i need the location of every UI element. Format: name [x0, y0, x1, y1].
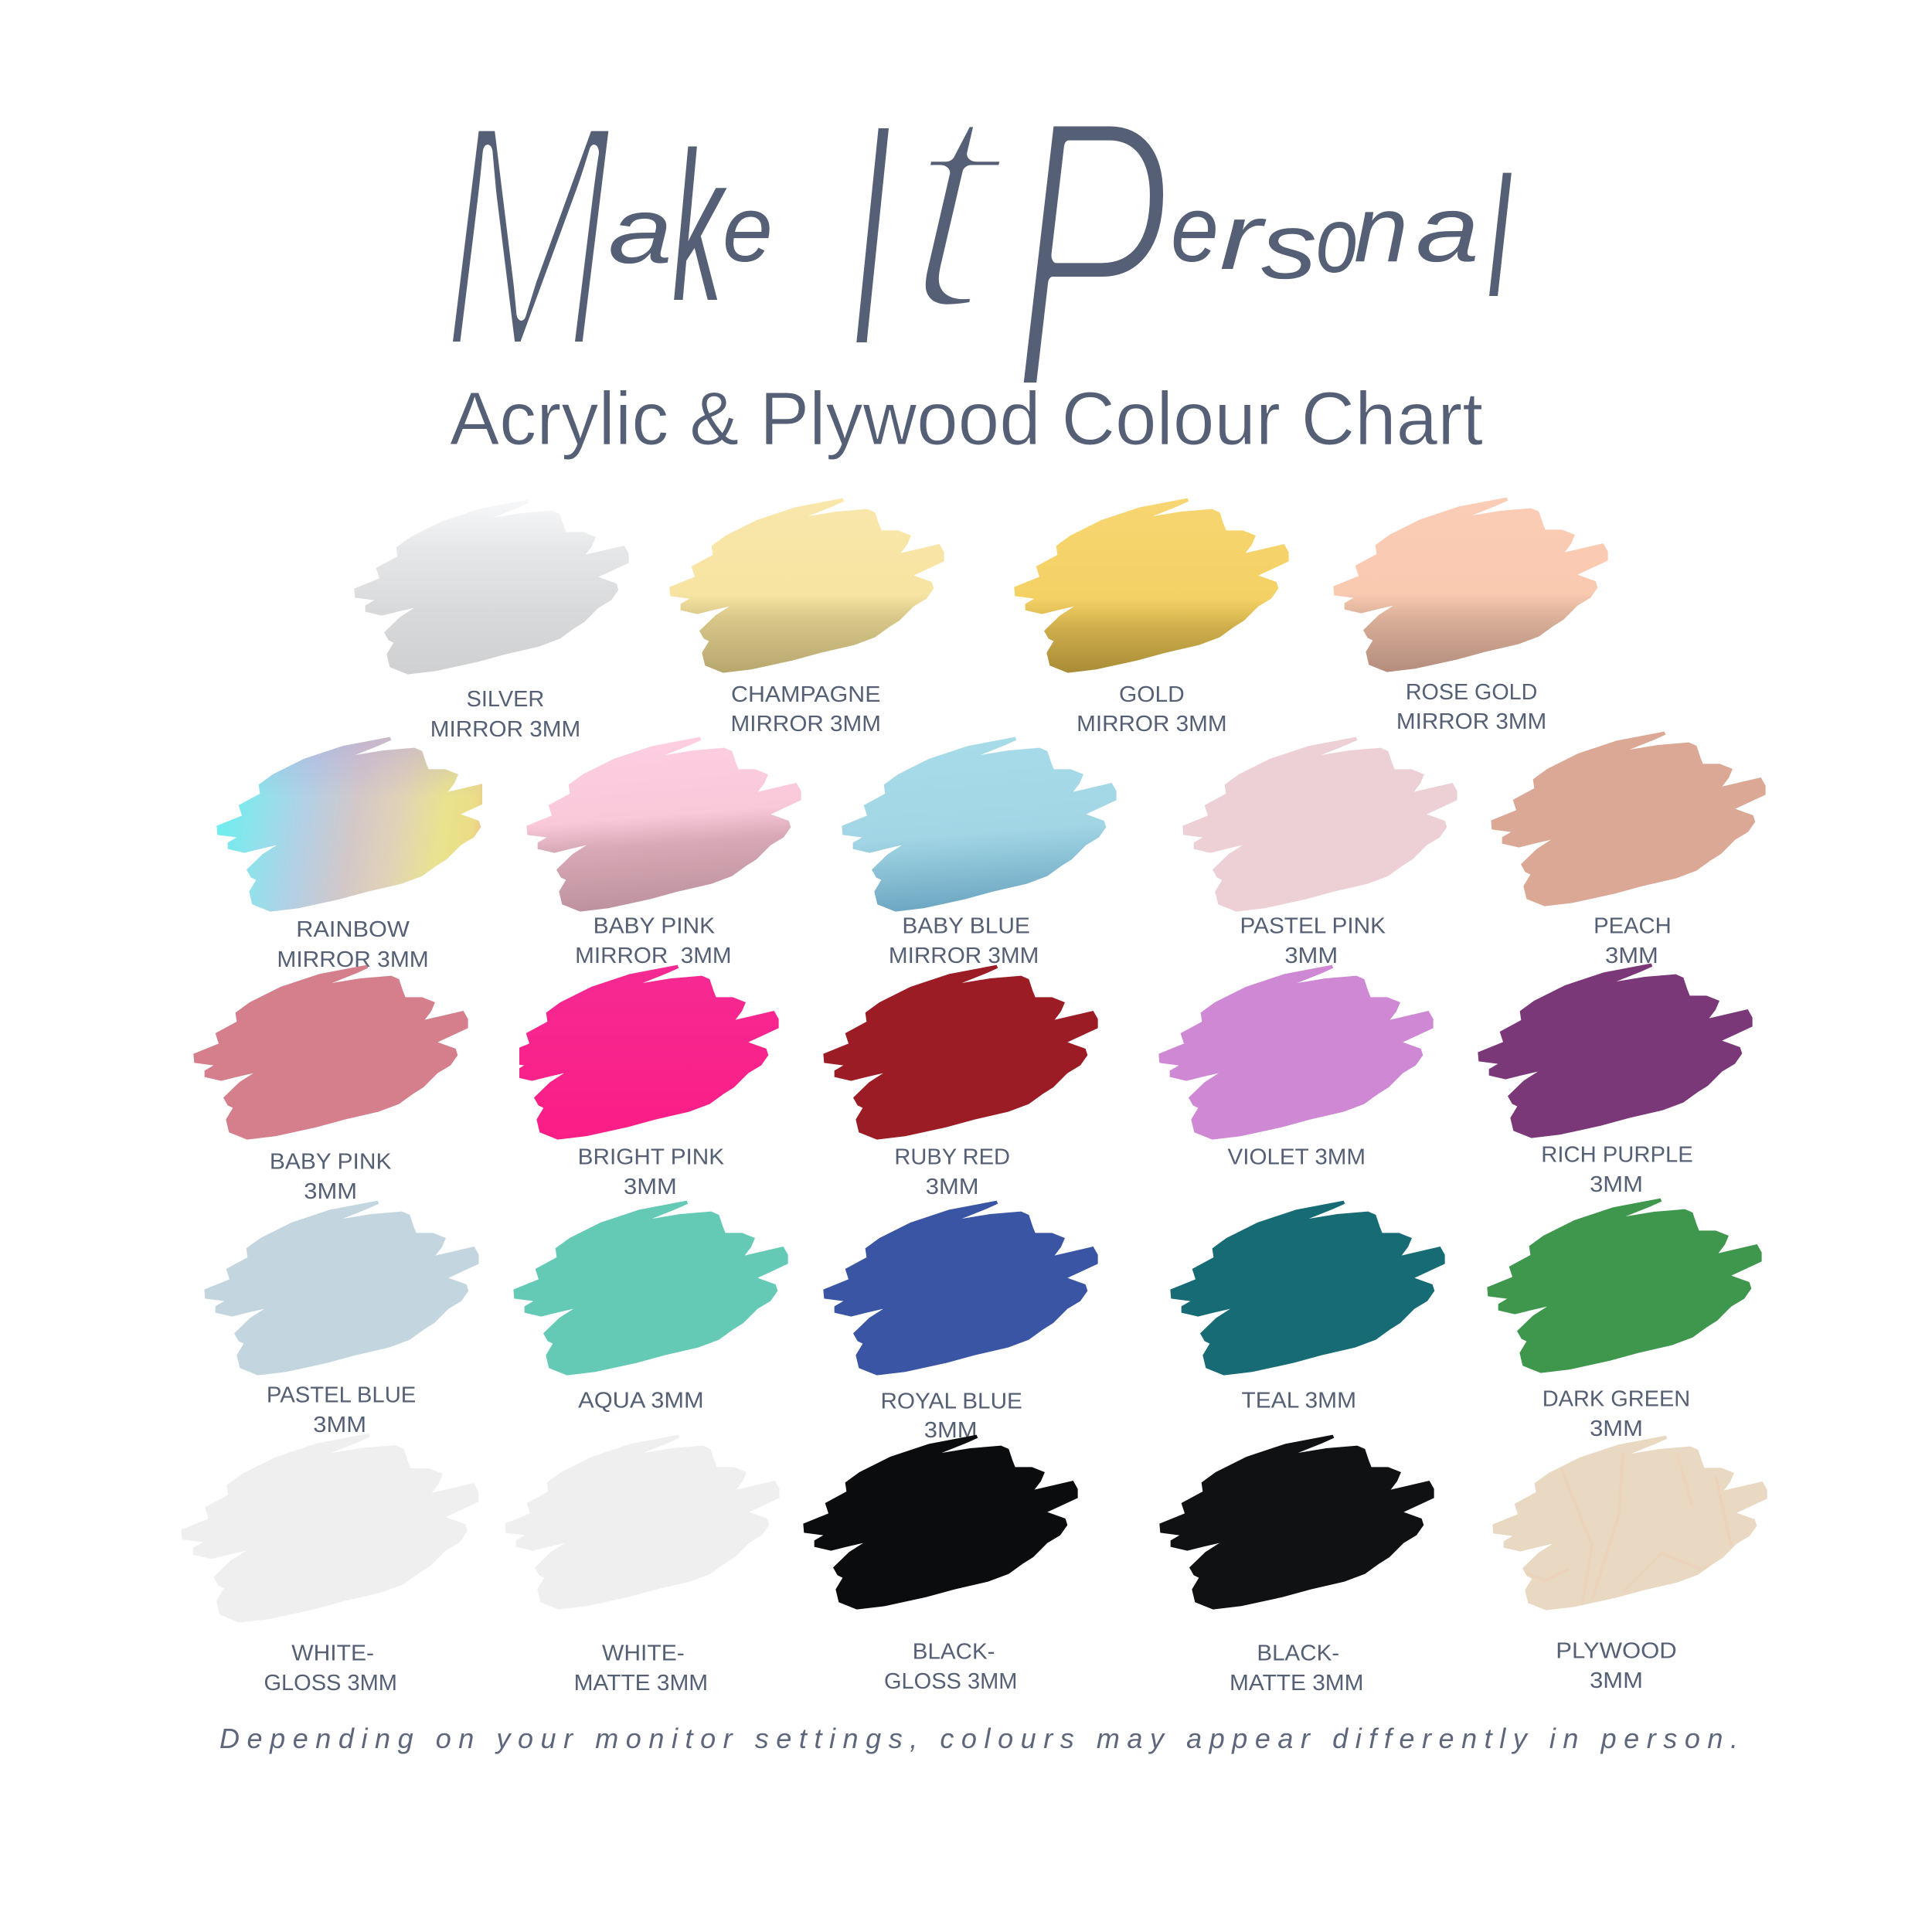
labels: fourth row: 3MM: [1590, 1417, 1643, 1441]
labels: second row: BABY BLUE: [902, 913, 1030, 938]
subtitle: Acrylic & Plywood Colour Chart: [450, 376, 1483, 461]
swatch: violet: [1158, 965, 1434, 1140]
labels: mirror row: MIRROR 3MM: [1077, 712, 1227, 736]
swatch: white gloss: [181, 1434, 478, 1623]
labels: fifth row: BLACK-: [913, 1639, 995, 1664]
labels: second row: 3MM: [1284, 944, 1338, 968]
labels: third row: 3MM: [304, 1179, 357, 1204]
labels: fifth row: WHITE-: [602, 1641, 685, 1665]
swatch: bright pink: [504, 965, 779, 1140]
labels: third row: BABY PINK: [270, 1149, 391, 1174]
labels: fourth row: 3MM: [924, 1418, 978, 1443]
swatch: pastel pink: [1182, 737, 1458, 912]
labels: third row: 3MM: [926, 1175, 979, 1199]
labels: mirror row: SILVER: [467, 687, 544, 712]
labels: mirror row: MIRROR 3MM: [1396, 709, 1546, 734]
labels: mirror row: CHAMPAGNE: [731, 682, 880, 707]
labels: mirror row: MIRROR 3MM: [731, 712, 881, 736]
labels: mirror row: GOLD: [1119, 682, 1185, 707]
labels: fourth row: TEAL 3MM: [1242, 1388, 1356, 1413]
labels: second row: MIRROR 3MM: [575, 944, 732, 968]
swatch: rich purple: [1478, 964, 1753, 1138]
swatch: dark green: [1487, 1199, 1762, 1373]
labels: mirror row: ROSE GOLD: [1406, 680, 1537, 705]
swatch: ruby red: [823, 965, 1098, 1140]
labels: third row: [270, 1142, 1693, 1204]
title: l: [1488, 142, 1512, 332]
swatch: white matte: [505, 1435, 780, 1610]
labels: fifth row: WHITE-: [291, 1641, 374, 1665]
labels: third row: VIOLET 3MM: [1228, 1145, 1366, 1169]
swatch: pastel blue: [204, 1201, 479, 1376]
title: r: [1219, 184, 1267, 289]
labels: mirror row: MIRROR 3MM: [430, 717, 580, 742]
labels: third row: RUBY RED: [894, 1145, 1010, 1169]
labels: fifth row: BLACK-: [1257, 1641, 1339, 1665]
labels: fourth row: [267, 1383, 1690, 1443]
title: o: [1316, 187, 1358, 292]
title: t: [900, 43, 1011, 372]
title: P: [1011, 33, 1170, 474]
labels: third row: RICH PURPLE: [1541, 1142, 1693, 1167]
title: e: [723, 176, 773, 281]
swatch: baby pink: [193, 965, 468, 1140]
title: s: [1261, 193, 1317, 298]
swatch: gold mirror: [1014, 498, 1289, 673]
swatch: baby pink mirror: [526, 737, 801, 912]
swatch: black gloss: [803, 1435, 1078, 1610]
labels: fifth row: 3MM: [1590, 1668, 1643, 1693]
title: k: [672, 109, 727, 345]
labels: fifth row: MATTE 3MM: [1230, 1671, 1364, 1696]
labels: fifth row: GLOSS 3MM: [264, 1671, 397, 1696]
labels: fifth row: MATTE 3MM: [574, 1671, 708, 1696]
labels: second row: 3MM: [1605, 944, 1658, 968]
labels: second row: PASTEL PINK: [1240, 913, 1386, 938]
labels: third row: 3MM: [624, 1175, 677, 1199]
labels: mirror row: [430, 680, 1546, 742]
title: a: [608, 178, 672, 283]
labels: second row: [277, 913, 1672, 972]
labels: third row: 3MM: [1590, 1172, 1643, 1197]
labels: fourth row: PASTEL BLUE: [267, 1383, 416, 1407]
swatch: royal blue: [823, 1201, 1098, 1376]
swatch: aqua: [513, 1201, 788, 1376]
labels: fifth row: PLYWOOD: [1556, 1638, 1677, 1663]
swatch: teal: [1170, 1201, 1445, 1376]
labels: fifth row: GLOSS 3MM: [884, 1669, 1017, 1694]
labels: fourth row: 3MM: [313, 1413, 366, 1437]
title: I: [846, 52, 895, 417]
swatch: champagne mirror: [669, 498, 944, 673]
labels: second row: MIRROR 3MM: [277, 947, 429, 972]
swatch: rose gold mirror: [1333, 498, 1608, 672]
title: e: [1171, 176, 1219, 281]
labels: third row: BRIGHT PINK: [578, 1145, 724, 1169]
labels: second row: PEACH: [1594, 913, 1672, 938]
labels: second row: MIRROR 3MM: [889, 944, 1039, 968]
labels: fourth row: AQUA 3MM: [578, 1388, 704, 1413]
labels: fifth row: [264, 1638, 1677, 1696]
swatch: baby blue mirror: [842, 737, 1117, 912]
swatch: plywood: [1492, 1436, 1767, 1611]
swatch: rainbow mirror: [216, 737, 492, 912]
footer note: Depending on your monitor settings, colours may appear differently in person.: [219, 1723, 1738, 1754]
swatch: black matte: [1159, 1435, 1434, 1610]
title: a: [1416, 176, 1479, 281]
swatch: peach: [1491, 732, 1766, 906]
labels: second row: BABY PINK: [594, 913, 715, 938]
labels: second row: RAINBOW: [296, 917, 410, 942]
title: n: [1354, 176, 1408, 281]
labels: fourth row: ROYAL BLUE: [880, 1389, 1022, 1413]
title: M: [440, 53, 617, 420]
labels: fourth row: DARK GREEN: [1543, 1386, 1690, 1411]
swatch: silver mirror: [354, 500, 629, 675]
